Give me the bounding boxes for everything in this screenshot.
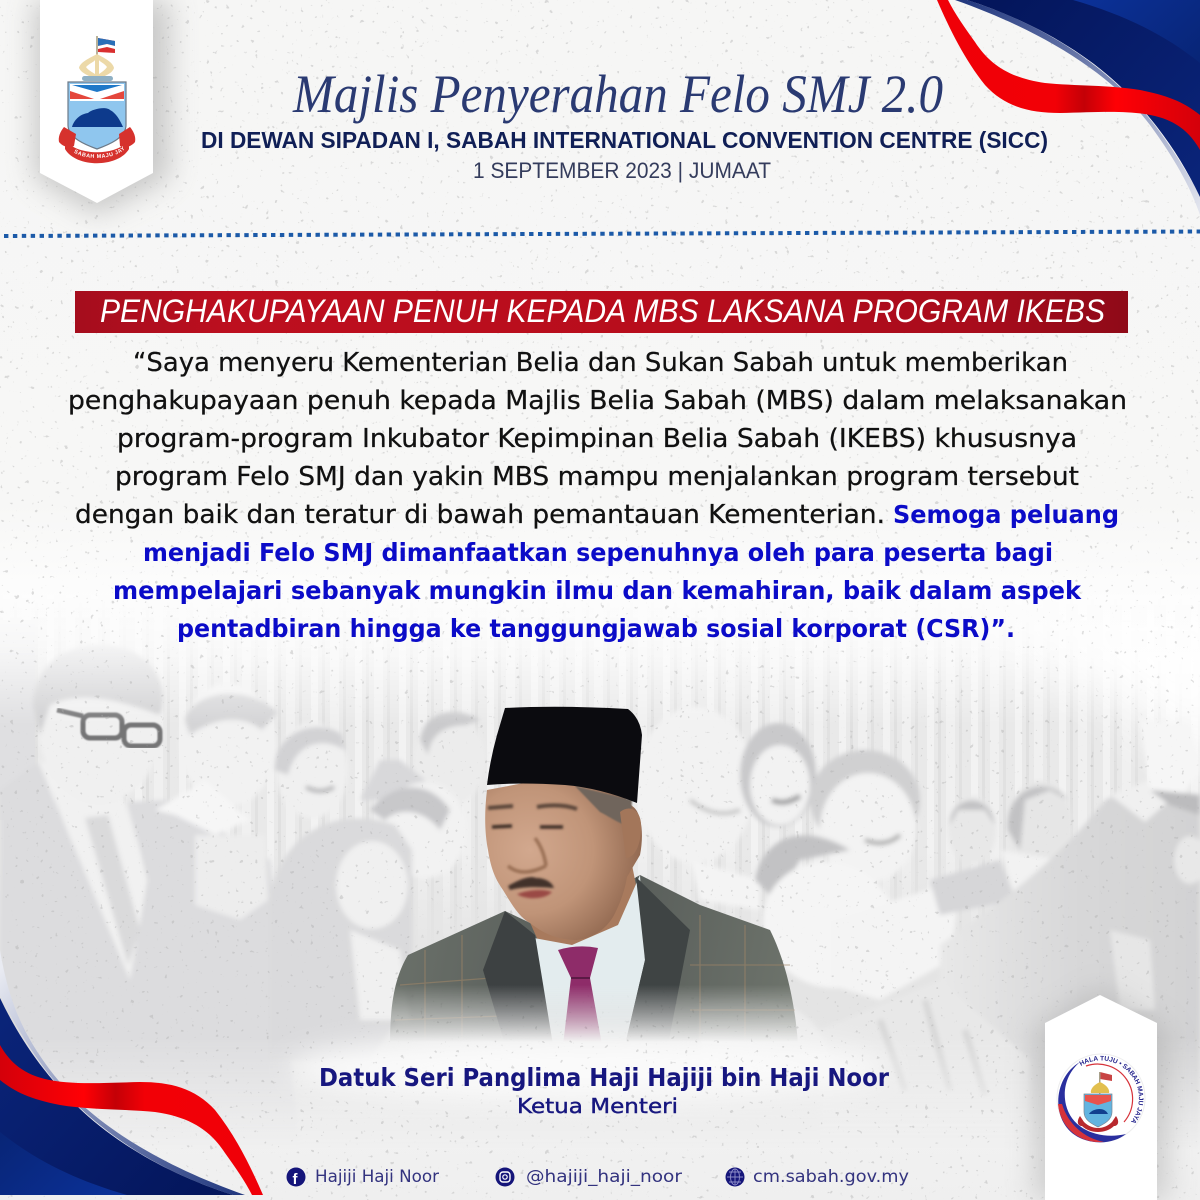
quote text: penghakupayaan penuh kepada Majlis Belia Sabah (MBS) dalam melaksanakan	[68, 386, 1127, 416]
tie	[558, 946, 602, 1045]
mini crest	[1100, 1072, 1112, 1081]
top right ribbon decoration	[937, 0, 1200, 215]
circular Hala Tuju logo	[1056, 1054, 1146, 1142]
crest flag	[96, 36, 115, 76]
glasses of left man	[57, 710, 160, 746]
bald man	[635, 707, 755, 863]
far men	[953, 812, 991, 860]
portrait of Chief Minister	[390, 707, 798, 1045]
quote text: dengan baik dan teratur di bawah pemantauan Kementerian.	[75, 500, 885, 530]
left lapel	[483, 911, 553, 1045]
left man suit	[1, 766, 273, 982]
left man head	[58, 699, 149, 796]
crest arms	[79, 54, 114, 78]
title script: Majlis Penyerahan Felo SMJ 2.0	[292, 64, 943, 124]
bottom batik	[1007, 1045, 1024, 1060]
quote text: mempelajari sebanyak mungkin ilmu dan kemahiran, baik dalam aspek	[113, 576, 1082, 605]
shirt	[534, 875, 645, 1045]
faded crowd photo background	[0, 644, 1200, 1122]
quote text: “Saya menyeru Kementerian Belia dan Sukan Sabah untuk memberikan	[133, 348, 1068, 378]
big smile woman	[810, 750, 920, 850]
date: 1 SEPTEMBER 2023 | JUMAAT	[473, 158, 771, 183]
crest logo	[58, 36, 136, 164]
crescent	[1058, 1062, 1126, 1142]
man with glasses behind	[276, 722, 348, 818]
social: website: cm.sabah.gov.my	[753, 1167, 909, 1187]
top left white banner	[40, 0, 153, 203]
name of person: Datuk Seri Panglima Haji Hajiji bin Haji Noor	[319, 1063, 890, 1092]
nose shadow	[508, 838, 546, 872]
quote text: program-program Inkubator Kepimpinan Belia Sabah (IKEBS) khususnya	[117, 424, 1077, 454]
smiling man top centre	[414, 715, 486, 805]
red headline banner: PENGHAKUPAYAAN PENUH KEPADA MBS LAKSANA PROGRAM IKEBS	[100, 293, 1105, 329]
quote text: pentadbiran hingga ke tanggungjawab sosial korporat (CSR)”.	[177, 614, 1015, 643]
quote text: menjadi Felo SMJ dimanfaatkan sepenuhnya oleh para peserta bagi	[143, 538, 1053, 567]
lips	[517, 890, 552, 898]
brows and eyes	[488, 805, 577, 809]
bottom left ribbon decoration	[0, 950, 263, 1195]
boy in front	[755, 835, 850, 900]
top left white banner shadow	[34, 0, 170, 215]
suit check lines	[395, 915, 795, 1040]
bottom right white banner	[1045, 995, 1157, 1200]
quote text: program Felo SMJ dan yakin MBS mampu menjalankan program tersebut	[115, 462, 1079, 492]
songkok hat	[487, 707, 642, 803]
soft vignette glow under portrait	[290, 1034, 890, 1102]
bottom right banner shadow	[1034, 988, 1168, 1200]
neck	[530, 868, 636, 945]
right lapel	[628, 877, 690, 1032]
quote text	[68, 348, 1127, 643]
crest base	[82, 76, 113, 81]
masked man	[186, 685, 267, 806]
face	[485, 780, 642, 940]
quote text: Semoga peluang	[893, 500, 1119, 529]
moustache	[508, 877, 554, 890]
social: facebook: Hajiji Haji Noor	[315, 1167, 439, 1187]
hijab woman	[270, 818, 412, 1060]
social: facebook: f	[292, 1171, 298, 1188]
suit jacket	[390, 875, 798, 1045]
shield	[68, 82, 126, 149]
right man suit	[942, 797, 1200, 1099]
venue subtitle: DI DEWAN SIPADAN I, SABAH INTERNATIONAL CONVENTION CENTRE (SICC)	[201, 127, 1048, 153]
side hair	[575, 786, 632, 825]
social: instagram: @hajiji_haji_noor	[526, 1167, 682, 1187]
ear	[620, 809, 641, 858]
ribbon motto	[58, 127, 136, 164]
role: Ketua Menteri	[517, 1094, 678, 1118]
woman behind	[740, 723, 816, 827]
circular Hala Tuju logo: HALA TUJU • SABAH MAJU JAYA	[1079, 1056, 1144, 1123]
